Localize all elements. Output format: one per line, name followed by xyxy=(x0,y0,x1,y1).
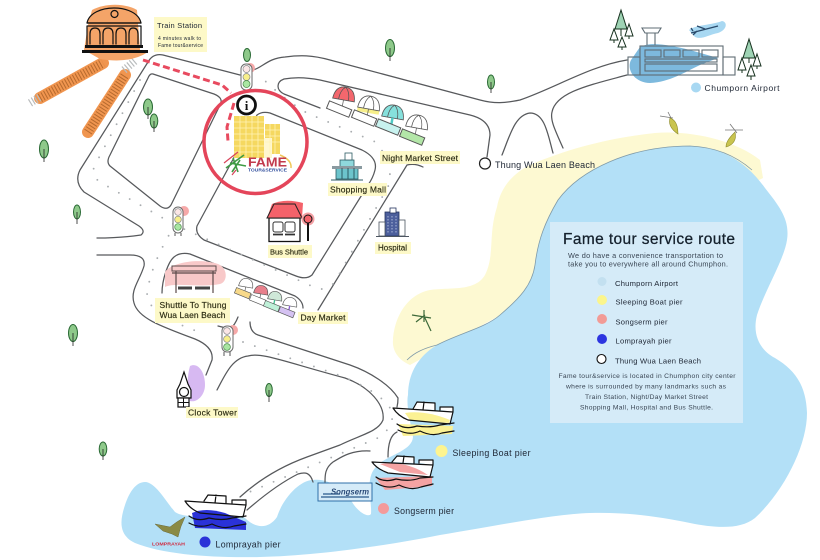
airport trees: right cluster xyxy=(738,39,761,80)
info panel xyxy=(550,222,743,423)
icon: info xyxy=(238,96,256,114)
icon: bus shuttle xyxy=(267,201,314,242)
traffic light: west xyxy=(173,206,189,236)
stall 4 xyxy=(399,109,433,146)
legend: Chumporn Airport xyxy=(615,279,679,288)
stall 2 xyxy=(249,282,272,306)
shoreline xyxy=(407,146,752,360)
stall 3 xyxy=(375,99,409,136)
icon: airplane xyxy=(689,21,726,38)
stall 1 xyxy=(326,81,360,118)
label: shuttle to thung wua laen beach xyxy=(155,298,230,323)
legend: Thung Wua Laen Beach xyxy=(615,356,701,366)
icon: shuttle stop xyxy=(165,261,226,293)
label: shopping mall: Shopping Mall xyxy=(330,184,386,194)
airport terminal xyxy=(628,28,735,83)
label: bus shuttle xyxy=(268,245,312,258)
label: clock tower: Clock Tower xyxy=(188,408,237,418)
label: hospital: Hospital xyxy=(378,244,407,252)
label: hospital xyxy=(375,242,411,254)
stall 3 xyxy=(263,288,286,312)
label: night market street: Night Market Street xyxy=(382,153,459,163)
label: train station: Fame tour&service xyxy=(158,43,203,49)
info panel: where is surrounded by many landmarks such as xyxy=(565,384,727,390)
label: sleeping boat pier: Sleeping Boat pier xyxy=(452,448,531,458)
beach sand xyxy=(393,132,763,365)
songserm logo xyxy=(318,483,372,501)
label: bus shuttle: Bus Shuttle xyxy=(270,248,308,256)
legend xyxy=(597,277,701,366)
label: lomprayah pier xyxy=(200,536,281,550)
legend: Songserm pier xyxy=(616,318,668,326)
icon: hospital xyxy=(376,208,409,236)
label: shuttle to thung wua laen beach: Shuttle To Thung xyxy=(160,300,227,310)
boat: lomprayah pier xyxy=(185,495,246,530)
boat: sleeping boat pier xyxy=(393,402,454,436)
fame logo: FAME xyxy=(248,154,287,170)
info panel: Train Station, Night/Day Market Street xyxy=(585,394,708,401)
info panel: Fame tour service route xyxy=(563,231,735,248)
sea xyxy=(121,146,807,557)
icon: clock tower xyxy=(177,365,205,407)
road dots xyxy=(93,78,393,493)
red location circle xyxy=(204,90,307,194)
stall 1 xyxy=(234,275,257,299)
train tracks xyxy=(30,60,136,132)
label: day market: Day Market xyxy=(300,312,346,322)
train station icon xyxy=(82,5,148,60)
info panel: We do have a convenience transportation to xyxy=(568,251,723,260)
day market stalls xyxy=(234,275,301,318)
legend: Sleeping Boat pier xyxy=(616,298,683,306)
icon: info: i xyxy=(245,98,249,113)
info panel: Shopping Mall, Hospital and Bus Shuttle. xyxy=(580,404,713,412)
info panel: Fame tour&service is located in Chumphon city center xyxy=(558,373,736,380)
trees xyxy=(40,40,494,460)
palm trees xyxy=(412,112,743,331)
label: sleeping boat pier xyxy=(436,445,531,458)
night market stalls xyxy=(326,81,433,146)
thung wua laen beach marker: Thung Wua Laen Beach xyxy=(495,160,595,170)
stall 4 xyxy=(278,294,301,318)
fame logo xyxy=(224,116,291,175)
fame logo: TOUR&SERVICE xyxy=(248,168,288,174)
airport trees: left cluster xyxy=(610,10,633,50)
lomprayah logo xyxy=(152,517,186,548)
lomprayah logo: LOMPRAYAH xyxy=(152,542,186,548)
label: songserm pier xyxy=(378,503,454,516)
info panel: take you to everywhere all around Chumphon. xyxy=(568,260,728,268)
traffic light: north xyxy=(241,63,255,90)
label: train station: Train Station xyxy=(157,21,202,30)
label: lomprayah pier: Lomprayah pier xyxy=(216,540,281,550)
roads xyxy=(78,55,627,510)
label: train station: 4 minutes walk to xyxy=(158,36,201,42)
icon: shopping mall xyxy=(331,153,363,180)
songserm logo: Songserm xyxy=(331,488,369,496)
boat: songserm pier xyxy=(372,456,433,490)
stall 2 xyxy=(351,90,385,127)
label: songserm pier: Songserm pier xyxy=(394,506,454,516)
label: chumporn airport: Chumporn Airport xyxy=(704,83,780,93)
label: shuttle to thung wua laen beach: Wua Laen Beach xyxy=(160,310,226,320)
walking route xyxy=(143,60,234,141)
label: train station xyxy=(154,17,207,52)
legend: Lomprayah pier xyxy=(616,336,672,346)
traffic light: south xyxy=(222,325,238,356)
